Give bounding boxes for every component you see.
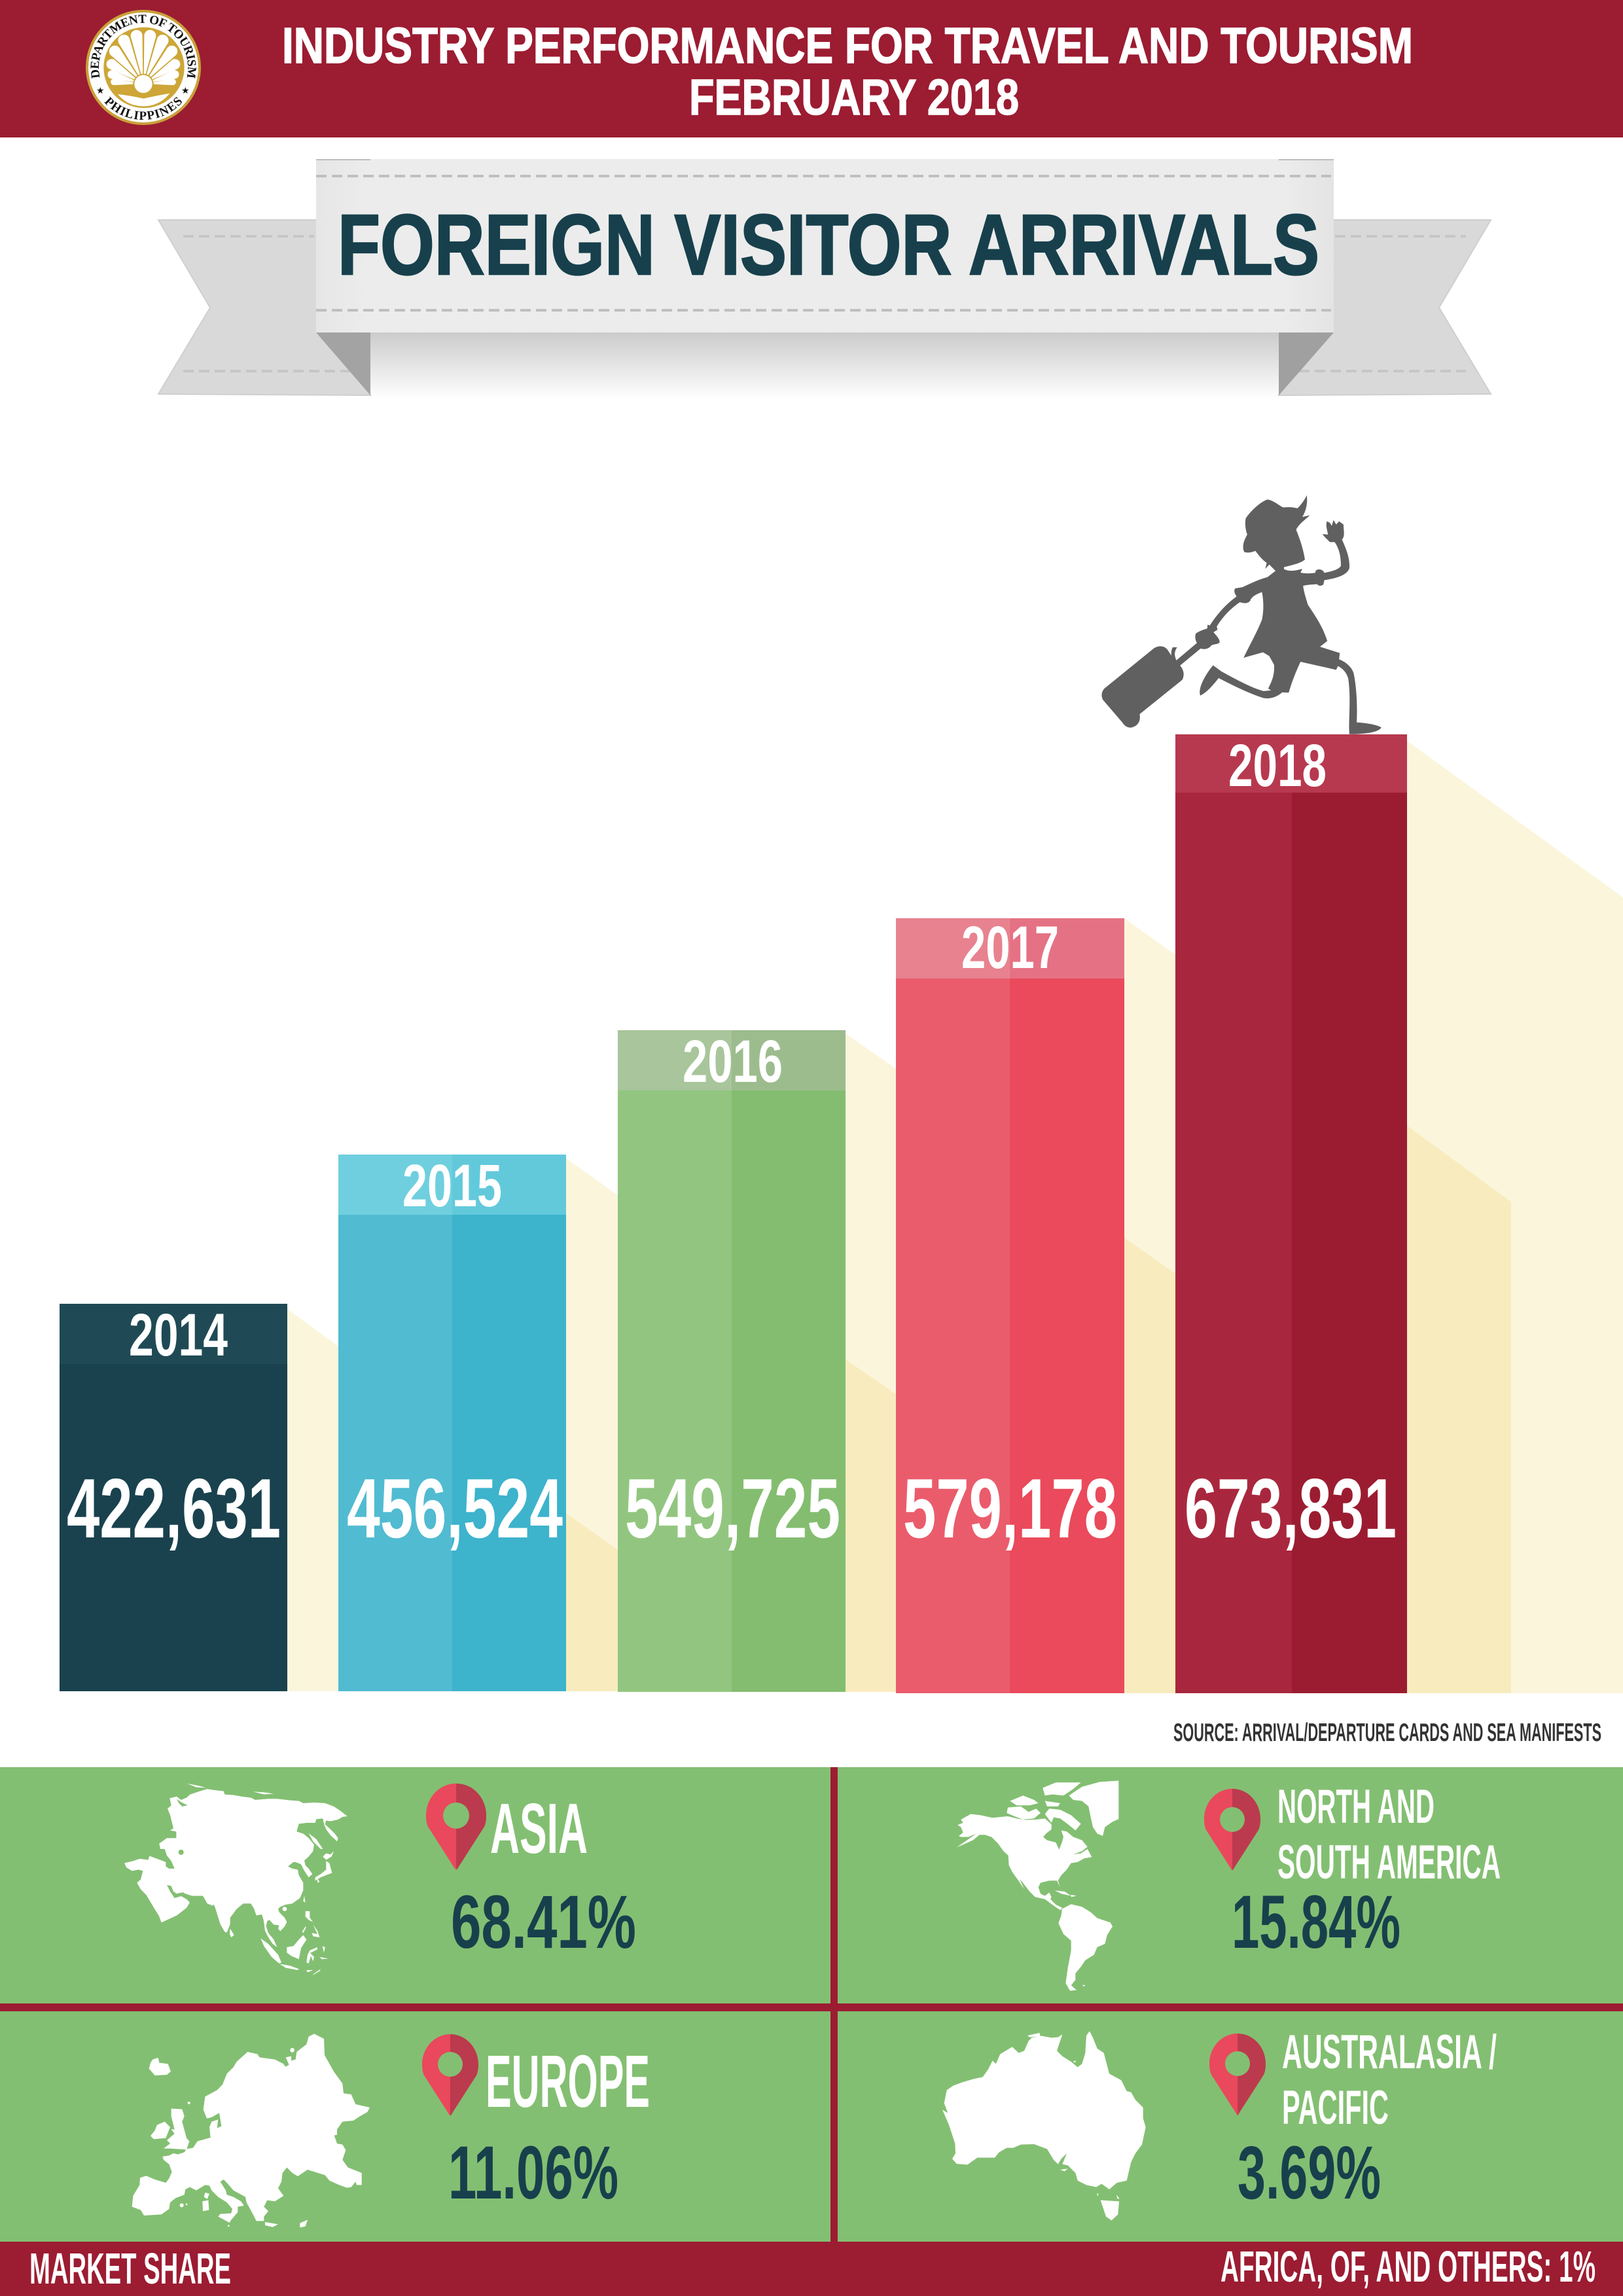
bar chart xyxy=(60,732,1623,1693)
value: Europe share: 11.06% xyxy=(448,2131,618,2215)
icon: map pin xyxy=(426,1784,486,1869)
bar 2018: 673,831 xyxy=(1185,1462,1397,1556)
bar 2017 xyxy=(896,914,1124,1693)
logo: Department of Tourism seal: ★ xyxy=(96,86,105,96)
bar 2014 xyxy=(60,1302,287,1691)
value: Asia share: 68.41% xyxy=(451,1880,636,1964)
ribbon banner xyxy=(158,159,1491,399)
icon: map pin xyxy=(422,2034,478,2115)
bar 2014: 2014 xyxy=(129,1302,228,1369)
panel: Australasia / Pacific xyxy=(942,2026,1497,2221)
footer bar xyxy=(0,2242,1623,2296)
bar 2016 xyxy=(618,1028,846,1692)
map: Asia xyxy=(124,1784,348,1975)
panel: Asia xyxy=(124,1784,636,1975)
logo: Department of Tourism seal: DEPARTMENT OF TOURISM xyxy=(90,14,196,79)
header title line 2: FEBRUARY 2018 xyxy=(689,69,1019,126)
value: Americas share: 15.84% xyxy=(1232,1880,1400,1964)
bar 2018: 2018 xyxy=(1228,732,1327,799)
logo: Department of Tourism seal xyxy=(86,10,201,125)
map: Americas xyxy=(957,1781,1118,1991)
icon: map pin xyxy=(1209,2034,1266,2115)
main title: FOREIGN VISITOR ARRIVALS xyxy=(338,196,1319,293)
bar 2017: 579,178 xyxy=(903,1462,1117,1556)
icon: map pin xyxy=(1204,1789,1260,1870)
label: Europe: EUROPE xyxy=(486,2040,650,2123)
logo: Department of Tourism seal: PHILIPPINES xyxy=(104,96,182,120)
label: Pacific: PACIFIC xyxy=(1282,2081,1389,2134)
market share section background and dividers xyxy=(0,1767,1623,2242)
bar 2015: 2015 xyxy=(402,1153,502,1219)
label: Asia: ASIA xyxy=(490,1789,588,1869)
bar 2017: 2017 xyxy=(961,914,1059,981)
bar 2014: 422,631 xyxy=(67,1462,281,1556)
logo: Department of Tourism seal: ★ xyxy=(181,86,190,96)
bar 2016: 549,725 xyxy=(625,1462,840,1556)
value: Australasia share: 3.69% xyxy=(1238,2131,1381,2215)
bar 2016: 2016 xyxy=(683,1028,783,1095)
icon: running traveller with suitcase xyxy=(1101,495,1382,734)
map: Australia xyxy=(942,2031,1146,2221)
label: North and: NORTH AND xyxy=(1277,1780,1435,1833)
footer label: market share: MARKET SHARE xyxy=(29,2244,231,2293)
bar 2015: 456,524 xyxy=(347,1462,563,1556)
panel: North and South America xyxy=(957,1780,1501,1991)
header title line 1: INDUSTRY PERFORMANCE FOR TRAVEL AND TOURISM xyxy=(282,18,1413,74)
panel: Europe xyxy=(132,2034,650,2227)
header bar xyxy=(0,0,1623,137)
map: Europe xyxy=(132,2034,370,2227)
bar 2018 xyxy=(1175,732,1407,1693)
bar 2015 xyxy=(338,1153,566,1691)
